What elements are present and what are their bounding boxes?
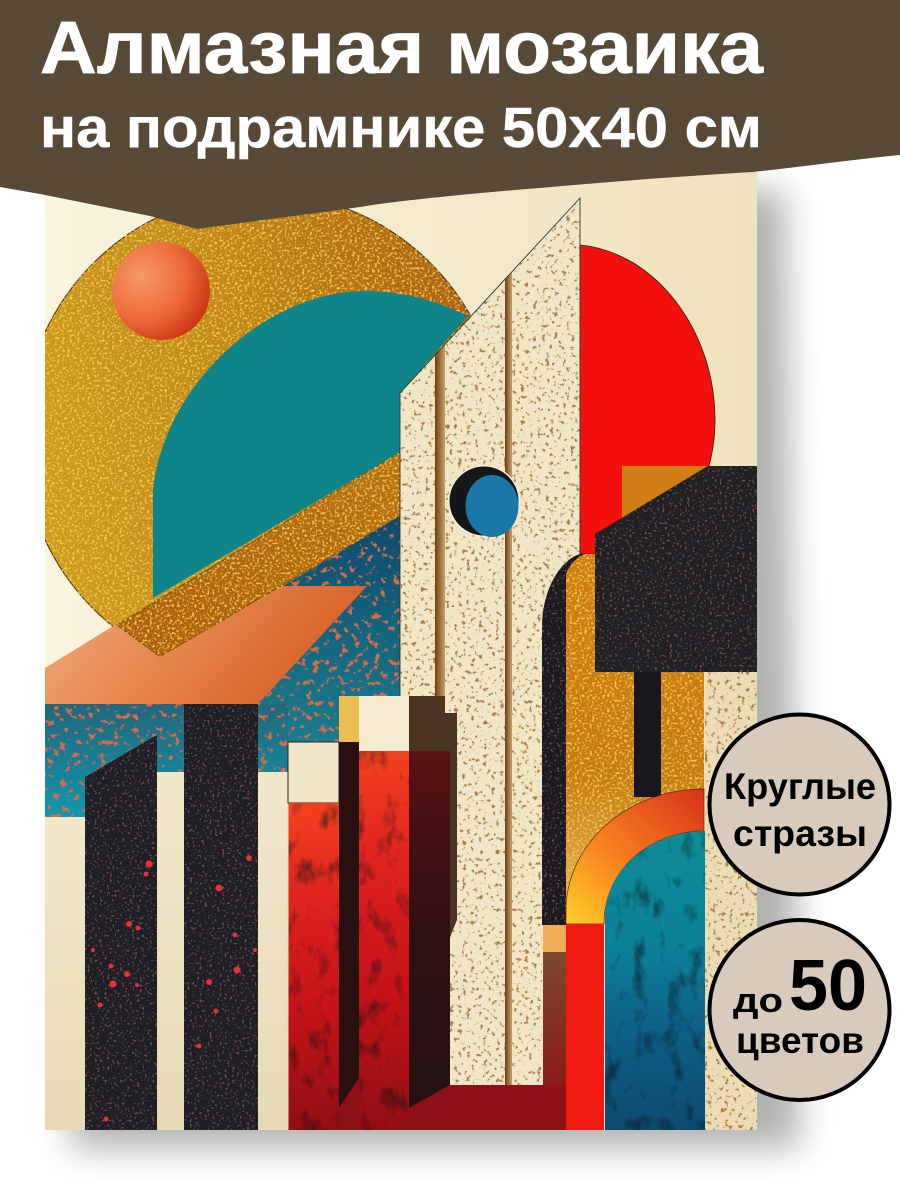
large gold circle <box>45 208 471 654</box>
maroon column <box>409 751 450 1108</box>
dark column middle <box>184 704 258 1130</box>
column gaps <box>435 271 512 1087</box>
painting canvas <box>22 170 757 1130</box>
orange sphere <box>112 242 210 340</box>
base bottom <box>339 1078 448 1130</box>
badge: round rhinestones <box>710 714 890 894</box>
badge: round rhinestones: стразы <box>733 813 867 854</box>
speckled blue field <box>258 516 400 742</box>
brown top block <box>409 696 457 937</box>
dark column left <box>85 735 157 1130</box>
red semicircle <box>580 245 715 554</box>
badge: up to 50 colours: до <box>733 982 783 1020</box>
gold diagonal band <box>117 452 400 657</box>
orange wedge <box>45 586 367 704</box>
canvas drop shadow <box>70 190 800 1148</box>
teal half shape <box>153 291 468 598</box>
cream box 1 <box>288 742 339 803</box>
lower cream strips <box>45 772 289 1130</box>
gold arch panel <box>566 554 704 925</box>
dark block <box>595 466 757 672</box>
dark arch strip <box>542 554 585 925</box>
header banner <box>0 0 900 229</box>
red column 2 <box>359 751 411 1130</box>
cream column A <box>400 355 435 700</box>
badge: round rhinestones: Круглые <box>724 766 876 807</box>
yellow box <box>339 696 359 742</box>
red dots on left column <box>91 860 152 1122</box>
dark thin column <box>339 742 359 1108</box>
cream column B <box>445 279 505 1085</box>
red column 1 <box>288 803 339 1130</box>
cream box 2 <box>359 696 409 735</box>
blue band left <box>45 704 288 817</box>
subtitle: на подрамнике 50х40 см <box>40 96 762 160</box>
peach box <box>543 925 566 952</box>
column top edge line <box>400 198 580 700</box>
red dots on middle column <box>196 855 257 1048</box>
base under columns <box>409 1085 543 1115</box>
badge: up to 50 colours: цветов <box>736 1020 864 1061</box>
red column right <box>566 924 604 1130</box>
badge: up to 50 colours: 50 <box>789 946 867 1026</box>
title: Алмазная мозаика <box>40 6 764 89</box>
cream background <box>45 170 757 1130</box>
brown box <box>543 952 566 1086</box>
dark stem <box>634 672 661 797</box>
orange arch <box>566 789 704 924</box>
teal arch <box>605 831 705 1130</box>
gold triangle patch <box>622 466 708 518</box>
badge: up to 50 colours <box>710 920 890 1100</box>
black and blue ball <box>448 465 520 537</box>
cream column C <box>512 198 580 1085</box>
speckled cream right strip <box>705 672 757 1130</box>
